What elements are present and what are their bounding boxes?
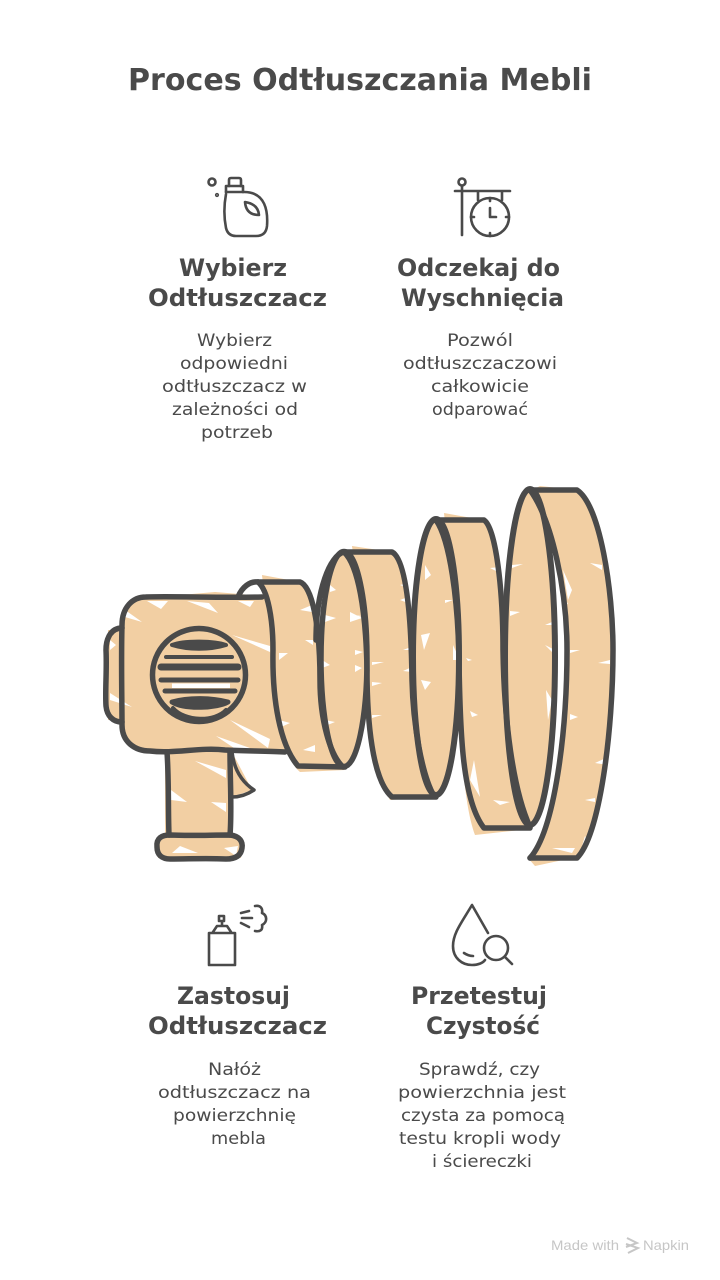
grill highlight xyxy=(172,684,230,688)
text: wait description: całkowicie xyxy=(431,377,529,397)
text: test description: i ściereczki xyxy=(432,1152,532,1172)
text: choose description: odpowiedni xyxy=(180,354,288,374)
spiral bands xyxy=(258,489,613,858)
heading: Przetestuj Czystość xyxy=(411,982,547,1040)
text: test description: Sprawdź, czy xyxy=(419,1060,540,1080)
text: wait description: Pozwól xyxy=(447,331,513,351)
panel: wait to dry xyxy=(397,178,564,420)
text: choose description: odtłuszczacz w xyxy=(162,377,307,397)
megaphone outline xyxy=(106,582,285,859)
text: apply description: mebla xyxy=(211,1129,266,1149)
text: apply description: Nałóż xyxy=(208,1060,261,1080)
heading: Wybierz Odtłuszczacz: Odtłuszczacz xyxy=(148,284,327,312)
icon: detergent bottle xyxy=(208,178,267,236)
heading: Zastosuj Odtłuszczacz: Odtłuszczacz xyxy=(148,1012,327,1040)
title: Proces Odtłuszczania Mebli xyxy=(128,63,592,98)
text: test description: powierzchnia jest xyxy=(398,1083,566,1103)
panel: apply degreaser xyxy=(148,906,327,1149)
footer: Made with Napkin: Made with xyxy=(551,1237,619,1253)
text: test description xyxy=(398,1060,566,1172)
text: wait description xyxy=(403,331,557,420)
heading: Wybierz Odtłuszczacz xyxy=(148,254,327,312)
text: choose description: potrzeb xyxy=(201,423,273,443)
heading: Przetestuj Czystość: Czystość xyxy=(426,1012,540,1040)
footer: Made with Napkin xyxy=(551,1237,689,1253)
grill xyxy=(152,628,246,722)
text: choose description: zależności od xyxy=(172,400,298,420)
illustration: spiral megaphone xyxy=(106,486,613,866)
heading: Zastosuj Odtłuszczacz: Zastosuj xyxy=(177,982,290,1010)
icon: water drop with magnifier xyxy=(453,905,512,965)
panel: test cleanliness xyxy=(398,905,566,1172)
icon: hanging clock xyxy=(455,178,510,236)
heading: Odczekaj do Wyschnięcia xyxy=(397,254,564,312)
text: apply description xyxy=(158,1060,311,1149)
heading: Odczekaj do Wyschnięcia: Wyschnięcia xyxy=(401,284,564,312)
text: test description: testu kropli wody xyxy=(399,1129,561,1149)
text: apply description: powierzchnię xyxy=(173,1106,296,1126)
text: test description: czysta za pomocą xyxy=(401,1106,565,1126)
heading: Odczekaj do Wyschnięcia: Odczekaj do xyxy=(397,254,560,282)
text: choose description: Wybierz xyxy=(197,331,272,351)
sketch highlights xyxy=(110,563,610,856)
text: wait description: odparować xyxy=(432,400,528,420)
icon: spray can xyxy=(209,906,266,965)
heading: Zastosuj Odtłuszczacz xyxy=(148,982,327,1040)
footer: Made with Napkin: Napkin xyxy=(643,1237,689,1253)
heading: Wybierz Odtłuszczacz: Wybierz xyxy=(179,254,287,282)
heading: Przetestuj Czystość: Przetestuj xyxy=(411,982,547,1010)
text: wait description: odtłuszczaczowi xyxy=(403,354,557,374)
text: choose description xyxy=(162,331,307,443)
panel: choose degreaser xyxy=(148,178,327,443)
text: apply description: odtłuszczacz na xyxy=(158,1083,311,1103)
sketch fill xyxy=(108,486,613,866)
